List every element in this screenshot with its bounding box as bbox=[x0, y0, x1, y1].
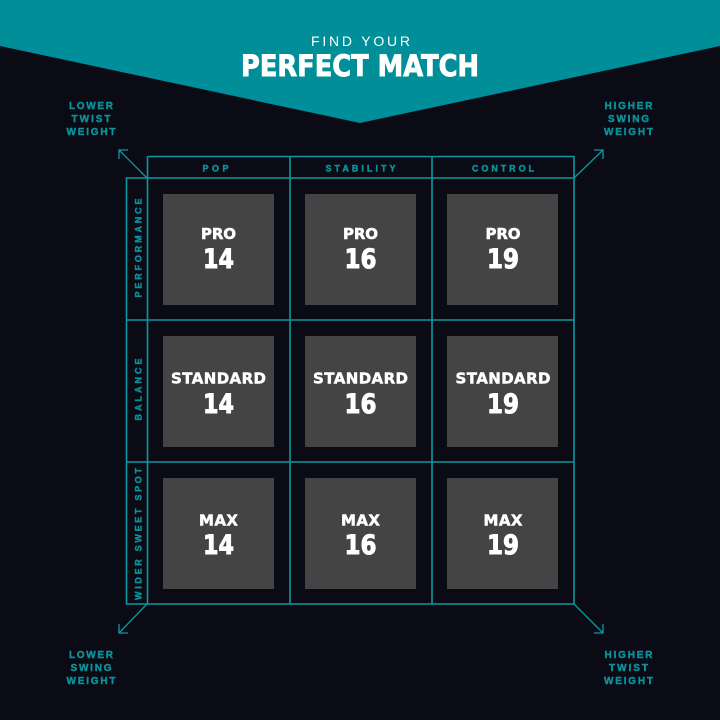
cell: Max 14 bbox=[163, 478, 274, 589]
cell: Pro 16: PRO bbox=[343, 225, 378, 243]
cell: Pro 19: PRO bbox=[486, 225, 520, 243]
cell: Standard 16 bbox=[305, 336, 416, 447]
label: higher swing weight: WEIGHT bbox=[604, 127, 653, 138]
cell: Max 19 bbox=[447, 478, 558, 589]
cell: Standard 19: 19 bbox=[487, 389, 519, 420]
label: higher twist weight bbox=[604, 650, 653, 687]
label: lower swing weight bbox=[66, 650, 116, 687]
cell: Pro 14: PRO bbox=[201, 225, 236, 243]
label: higher swing weight bbox=[604, 101, 653, 138]
title: PERFECT MATCH bbox=[241, 49, 479, 83]
label: lower swing weight: SWING bbox=[70, 663, 112, 674]
row headers: PERFORMANCE bbox=[134, 198, 144, 298]
row headers: BALANCE bbox=[134, 358, 144, 420]
cell: Max 19: MAX bbox=[484, 512, 523, 530]
cell: Standard 16: 16 bbox=[344, 389, 376, 420]
cell: Pro 19 bbox=[447, 194, 558, 305]
cell: Standard 14 bbox=[163, 336, 274, 447]
label: lower twist weight: TWIST bbox=[72, 114, 110, 125]
cell: Pro 19: 19 bbox=[487, 244, 519, 275]
label: higher twist weight: WEIGHT bbox=[604, 676, 653, 687]
cell: Standard 19: STANDARD bbox=[456, 370, 550, 388]
label: lower swing weight: WEIGHT bbox=[66, 676, 116, 687]
cell: Standard 14: STANDARD bbox=[171, 370, 266, 388]
cell: Max 14: 14 bbox=[203, 530, 234, 561]
cell: Max 14: MAX bbox=[199, 512, 238, 530]
cell: Standard 19 bbox=[447, 336, 558, 447]
arrow: up right bbox=[574, 150, 603, 178]
title: FIND YOUR bbox=[311, 33, 410, 49]
cell: Max 16: 16 bbox=[344, 530, 376, 561]
label: higher twist weight: HIGHER bbox=[604, 650, 653, 661]
cell: Max 16: MAX bbox=[341, 512, 380, 530]
cell: Standard 14: 14 bbox=[203, 389, 234, 420]
cell: Pro 16 bbox=[305, 194, 416, 305]
cell: Pro 14 bbox=[163, 194, 274, 305]
label: higher swing weight: SWING bbox=[608, 114, 649, 125]
cell: Standard 16: STANDARD bbox=[313, 370, 408, 388]
row headers: WIDER SWEET SPOT bbox=[134, 468, 144, 600]
grid lines bbox=[126, 156, 574, 604]
arrow: up left bbox=[119, 150, 147, 178]
row headers bbox=[134, 198, 144, 600]
title bbox=[241, 33, 479, 83]
column headers: STABILITY bbox=[326, 164, 396, 174]
label: lower twist weight: WEIGHT bbox=[66, 127, 116, 138]
column headers: CONTROL bbox=[472, 164, 534, 174]
column headers bbox=[202, 164, 534, 174]
arrow: down right bbox=[574, 604, 603, 633]
label: higher twist weight: TWIST bbox=[609, 663, 648, 674]
column headers: POP bbox=[202, 164, 228, 174]
label: lower twist weight bbox=[66, 101, 116, 138]
label: higher swing weight: HIGHER bbox=[604, 101, 653, 112]
cell: Max 16 bbox=[305, 478, 416, 589]
cell: Pro 16: 16 bbox=[344, 244, 376, 275]
label: lower twist weight: LOWER bbox=[69, 101, 114, 112]
header banner bbox=[0, 0, 720, 123]
label: lower swing weight: LOWER bbox=[69, 650, 114, 661]
cell: Max 19: 19 bbox=[487, 530, 519, 561]
cell: Pro 14: 14 bbox=[203, 244, 234, 275]
arrow: down left bbox=[119, 604, 147, 633]
